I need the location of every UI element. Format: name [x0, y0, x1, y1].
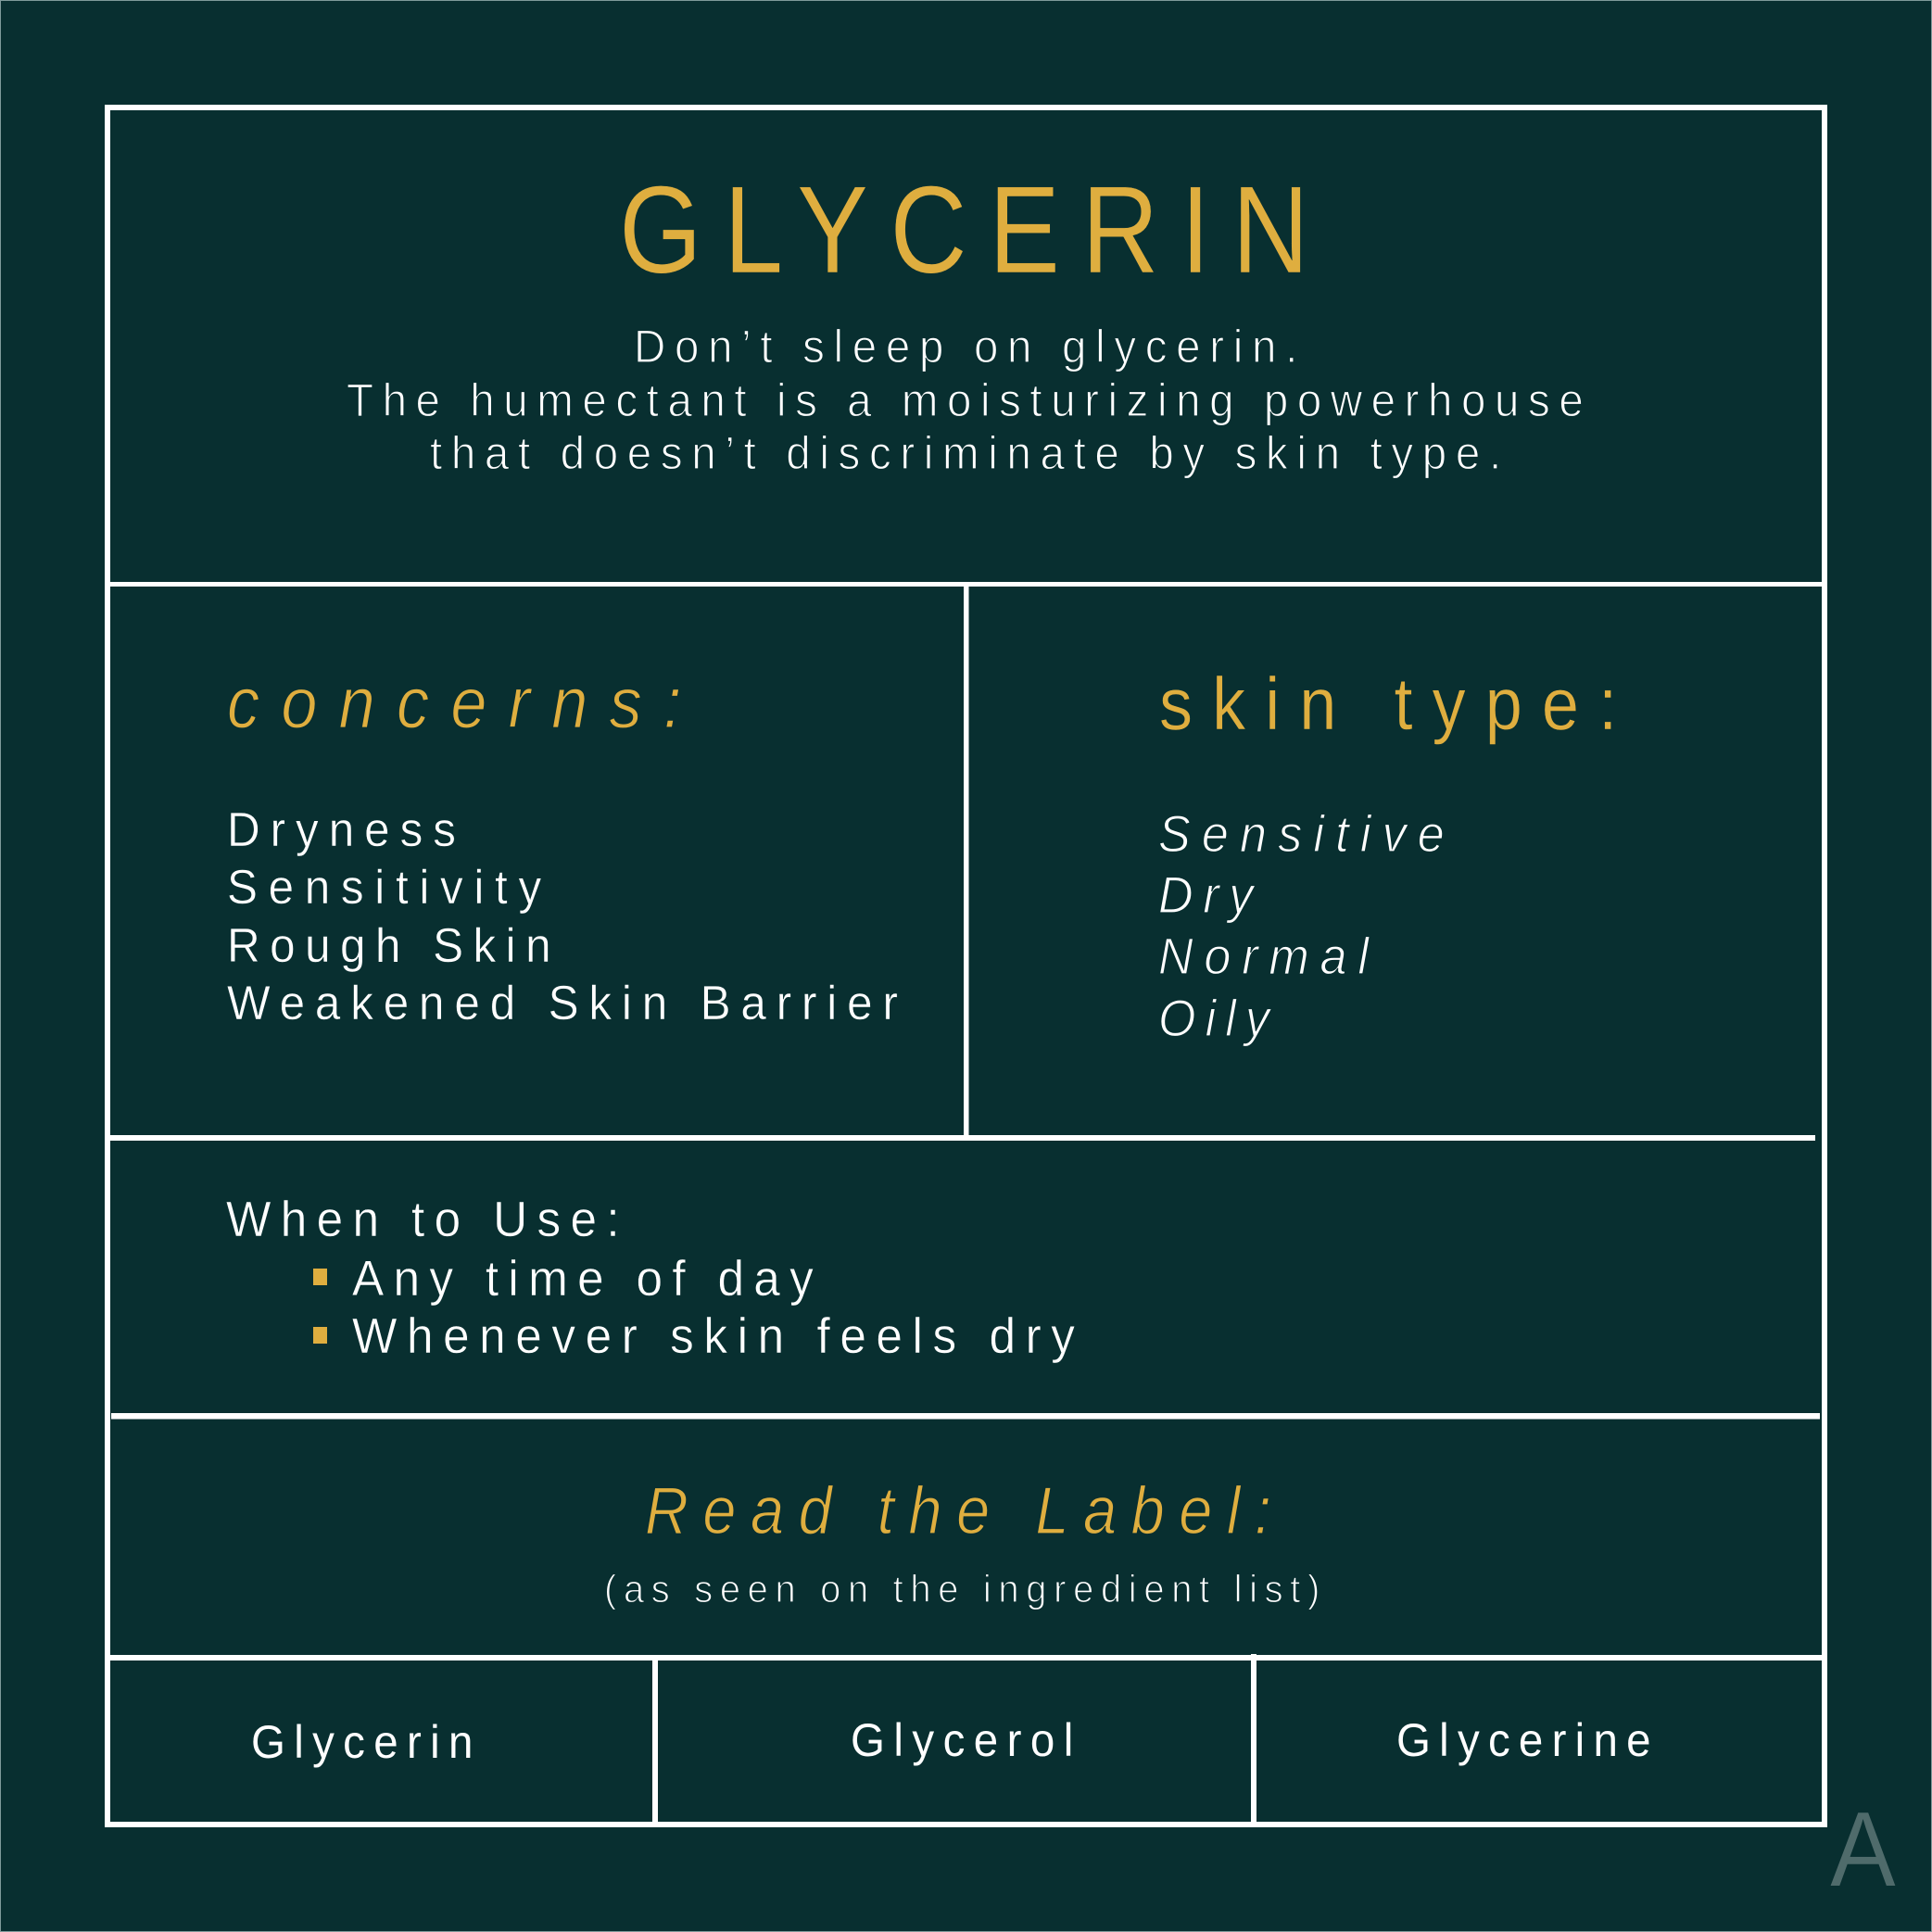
title: GLYCERIN	[619, 161, 1309, 299]
icon: bullet 2	[313, 1327, 327, 1344]
concerns list: Sensitivity	[227, 860, 542, 914]
name: Glycerin: Glycerin	[251, 1717, 473, 1768]
bullet text 1: Any time of day	[352, 1251, 814, 1307]
bullet text 2: Whenever skin feels dry	[352, 1308, 1076, 1364]
read the label note: (as seen on the ingredient list)	[604, 1567, 1320, 1610]
panel: read the label	[604, 1473, 1320, 1610]
panel: concerns	[227, 663, 898, 1029]
skin type list	[1158, 805, 1445, 1047]
logo: A watermark: A	[1830, 1790, 1896, 1909]
concerns list	[227, 802, 898, 1029]
concerns list: Rough Skin	[227, 918, 551, 972]
concerns list: Dryness	[227, 802, 456, 856]
name: Glycerol: Glycerol	[851, 1715, 1073, 1766]
skin type list: Oily	[1158, 990, 1272, 1047]
concerns list: Weakened Skin Barrier	[227, 976, 898, 1029]
panel: ingredient names	[251, 1715, 1651, 1768]
concerns heading: concerns:	[227, 663, 682, 743]
intro text: Don’t sleep on glycerin.	[634, 322, 1297, 373]
frame: table outline and dividers	[105, 105, 1827, 1827]
intro text: The humectant is a moisturizing powerhouse	[347, 375, 1584, 426]
intro text: that doesn’t discriminate by skin type.	[430, 428, 1501, 479]
intro text	[347, 322, 1584, 479]
skin type list: Sensitive	[1158, 805, 1445, 863]
panel: when to use	[226, 1192, 1076, 1364]
name: Glycerine: Glycerine	[1396, 1715, 1651, 1766]
panel: skin type	[1158, 663, 1617, 1047]
icon: bullet 1	[313, 1269, 327, 1285]
panel: header	[347, 161, 1584, 479]
skin type list: Normal	[1158, 928, 1370, 985]
skin type heading: skin type:	[1159, 663, 1617, 746]
skin type list: Dry	[1158, 866, 1256, 924]
read the label heading: Read the Label:	[645, 1473, 1271, 1548]
when to use heading: When to Use:	[226, 1192, 620, 1247]
